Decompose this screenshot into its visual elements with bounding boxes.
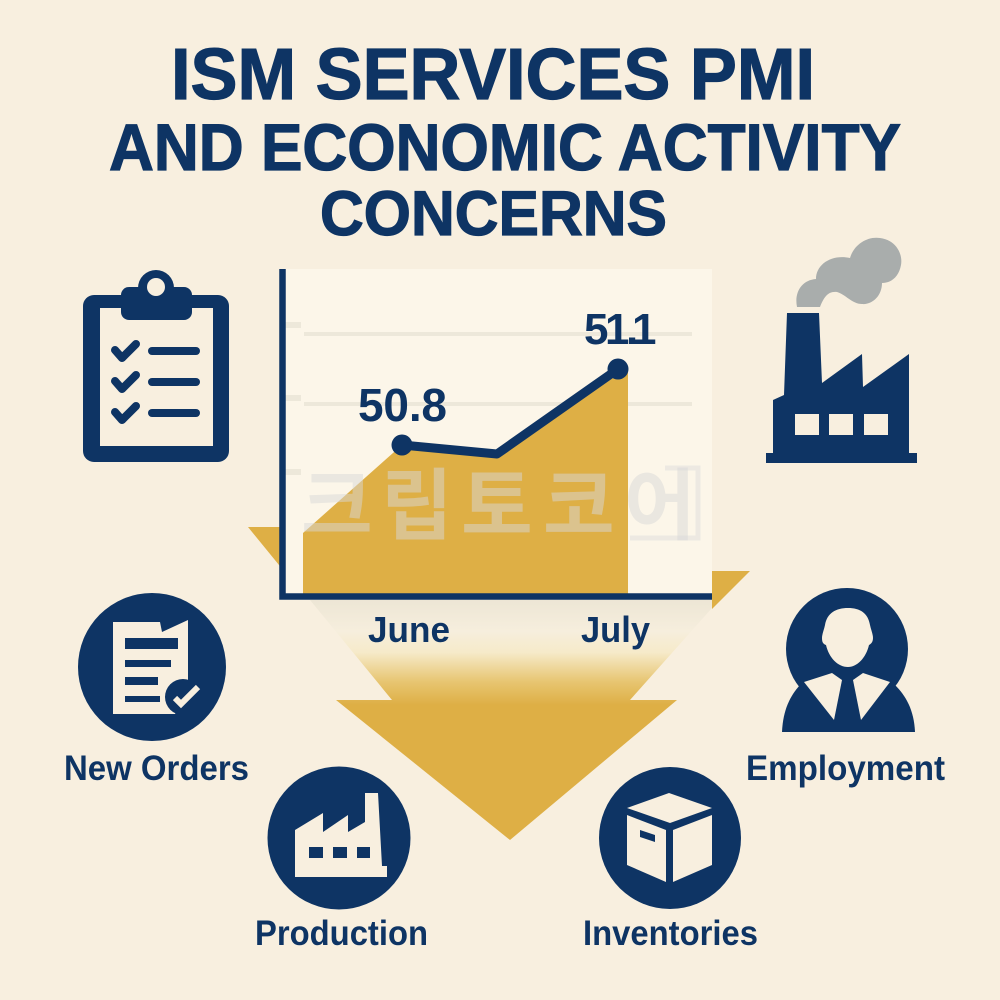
label: Employment: Employment: [746, 749, 945, 788]
panel: line chart: [282, 269, 712, 650]
title: [109, 35, 901, 249]
icon: employment: [782, 588, 915, 732]
smoke: [796, 238, 901, 307]
label: Production: Production: [255, 914, 428, 953]
icon: new orders: [78, 593, 226, 741]
title: ISM SERVICES PMI: [171, 35, 815, 115]
icon: production: [268, 766, 410, 910]
icon: inventories: [599, 767, 741, 909]
axis label: June: June: [368, 609, 450, 650]
label: Inventories: Inventories: [583, 914, 758, 953]
axis label: July: July: [581, 609, 650, 650]
value: July: 51.1: [584, 305, 656, 354]
watermark: 크립토코어: [301, 444, 696, 556]
title: CONCERNS: [320, 179, 667, 249]
axes: [282, 269, 712, 596]
icon: clipboard: [83, 270, 229, 462]
gold area: [303, 369, 628, 594]
value: June: 50.8: [358, 379, 447, 431]
data line: [392, 358, 628, 456]
label: New Orders: New Orders: [64, 749, 249, 788]
large downward arrow: [248, 527, 750, 840]
title: AND ECONOMIC ACTIVITY: [109, 110, 901, 184]
icon: factory with smoke: [766, 238, 917, 463]
